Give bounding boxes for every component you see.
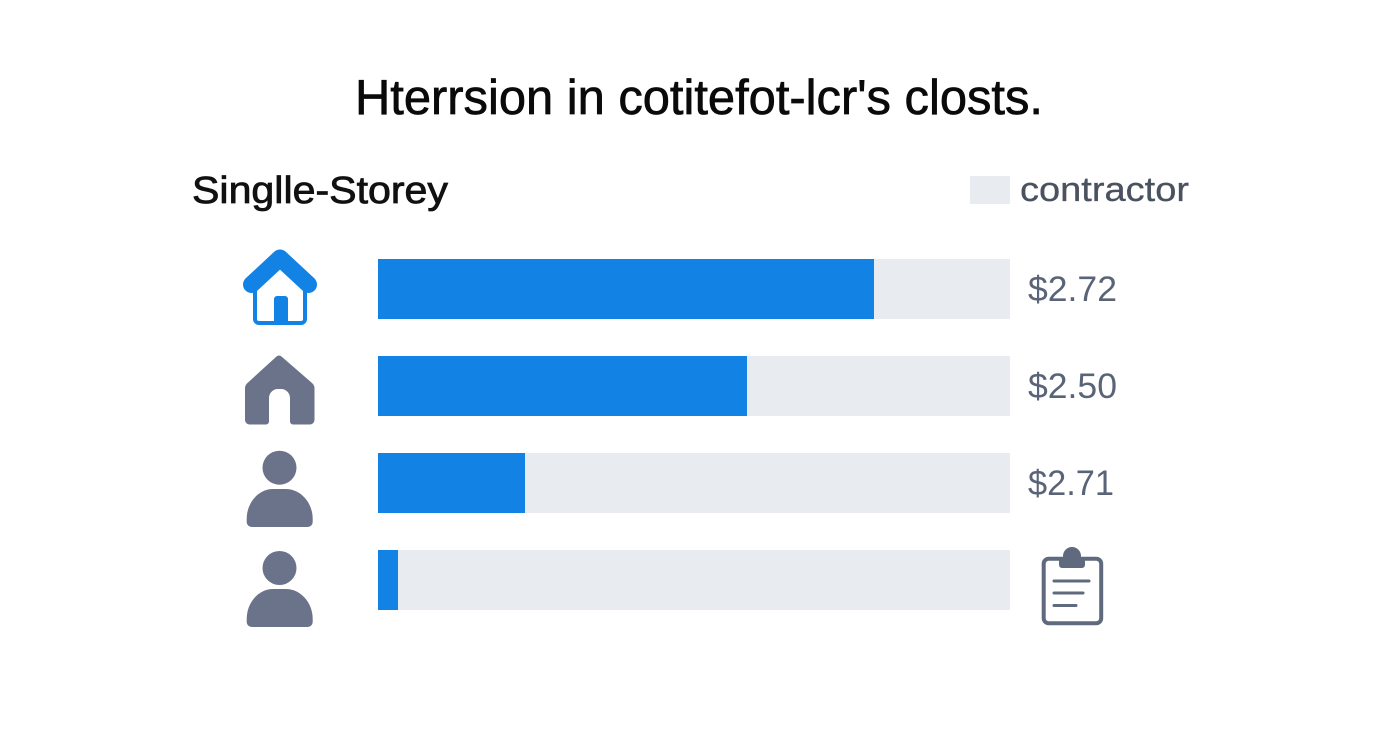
value 1: $2.72 [1028, 270, 1117, 309]
bar fill 1 [378, 259, 874, 319]
legend swatch [970, 176, 1010, 204]
icon: gray house [245, 356, 314, 424]
icon: person [247, 451, 313, 527]
bar track 1 [378, 259, 1010, 319]
icon: person [247, 551, 313, 627]
row 2 [245, 356, 1117, 424]
bar fill 4 [378, 550, 398, 610]
bar track 2 [378, 356, 1010, 416]
icon: blue house [252, 258, 308, 323]
section heading: Singlle-Storey [192, 170, 448, 212]
bar track 3 [378, 453, 1010, 513]
value 3: $2.71 [1028, 464, 1114, 503]
row 4 [247, 547, 1101, 627]
icon: clipboard [1044, 547, 1101, 623]
bar track 4 [378, 550, 1010, 610]
row 1 [252, 258, 1117, 323]
legend [970, 171, 1189, 209]
legend label: contractor [1020, 171, 1189, 209]
title: Hterrsion in cotitefot-lcr's closts. [355, 71, 1043, 125]
row 3 [247, 451, 1114, 527]
bar fill 2 [378, 356, 747, 416]
value 2: $2.50 [1028, 367, 1117, 406]
bar fill 3 [378, 453, 525, 513]
